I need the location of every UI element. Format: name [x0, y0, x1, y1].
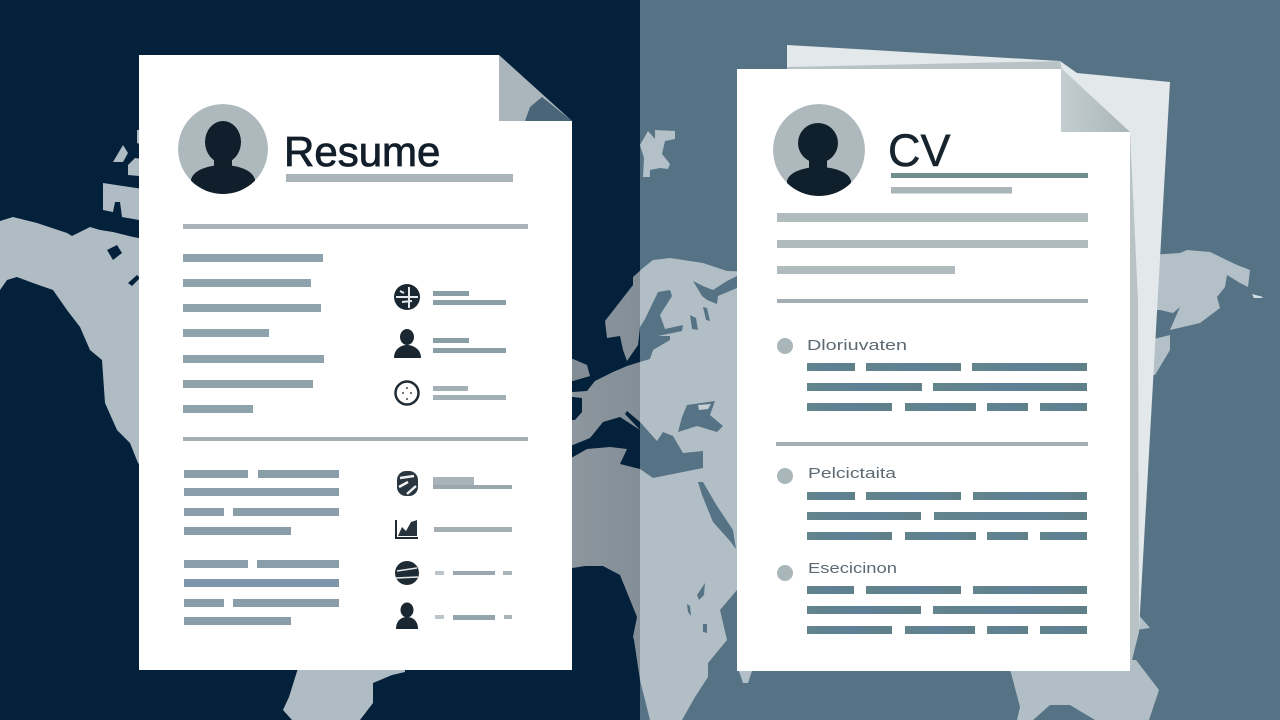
section lines: [807, 492, 1087, 540]
cv header lines: [891, 173, 1088, 194]
background: dark left half: [0, 0, 640, 720]
cv section: education: [777, 337, 1087, 411]
cv title: CV: [888, 125, 951, 176]
map: australia: [1005, 660, 1159, 720]
icon: recycle blob: [397, 471, 418, 496]
panel: resume document: [139, 55, 572, 670]
cv summary lines: [777, 213, 1088, 274]
map: europe and africa, left shaded part: [572, 270, 640, 680]
back sheet shadow: [787, 61, 1139, 668]
section label: Dloriuvaten: [807, 337, 907, 354]
resume contact lines: [433, 291, 512, 620]
section label: Esecicinon: [808, 560, 897, 577]
icon: clock ring: [396, 382, 418, 404]
resume page: [139, 55, 572, 670]
back sheet: [787, 45, 1170, 668]
panel: cv document stack: [737, 45, 1170, 671]
section lines: [807, 586, 1087, 634]
cv section: experience: [777, 560, 1087, 634]
cv divider 2: [776, 442, 1088, 446]
cv avatar: [773, 104, 865, 197]
icon: person small: [396, 602, 418, 629]
cv divider: [777, 299, 1088, 303]
map: small tip under paper: [738, 668, 753, 683]
section label: Pelcictaita: [808, 465, 897, 482]
section bullet: [777, 468, 793, 484]
cv page: [737, 69, 1130, 671]
section bullet: [777, 565, 793, 581]
map: asia right: [1136, 250, 1263, 630]
section bullet: [777, 338, 793, 354]
resume avatar: [178, 104, 268, 197]
resume folded corner: [499, 55, 572, 121]
icon: person: [394, 329, 421, 358]
icon: bar chart: [396, 520, 418, 538]
map: southern africa left: [283, 665, 405, 720]
resume title: Resume: [284, 128, 440, 175]
resume summary lines: [183, 254, 324, 413]
icon: globe dark: [395, 561, 419, 585]
cv folded corner: [1061, 68, 1130, 132]
section lines: [807, 363, 1087, 411]
map: north america land: [0, 130, 150, 475]
background: slate right half: [640, 0, 1280, 720]
icon: globe: [394, 284, 420, 310]
cv section: publications: [777, 465, 1087, 540]
resume section divider: [183, 437, 528, 441]
resume experience lines: [184, 470, 339, 625]
resume header lines: [183, 174, 528, 229]
map: europe and africa, light part: [640, 258, 737, 720]
map: northern island: [640, 130, 675, 177]
